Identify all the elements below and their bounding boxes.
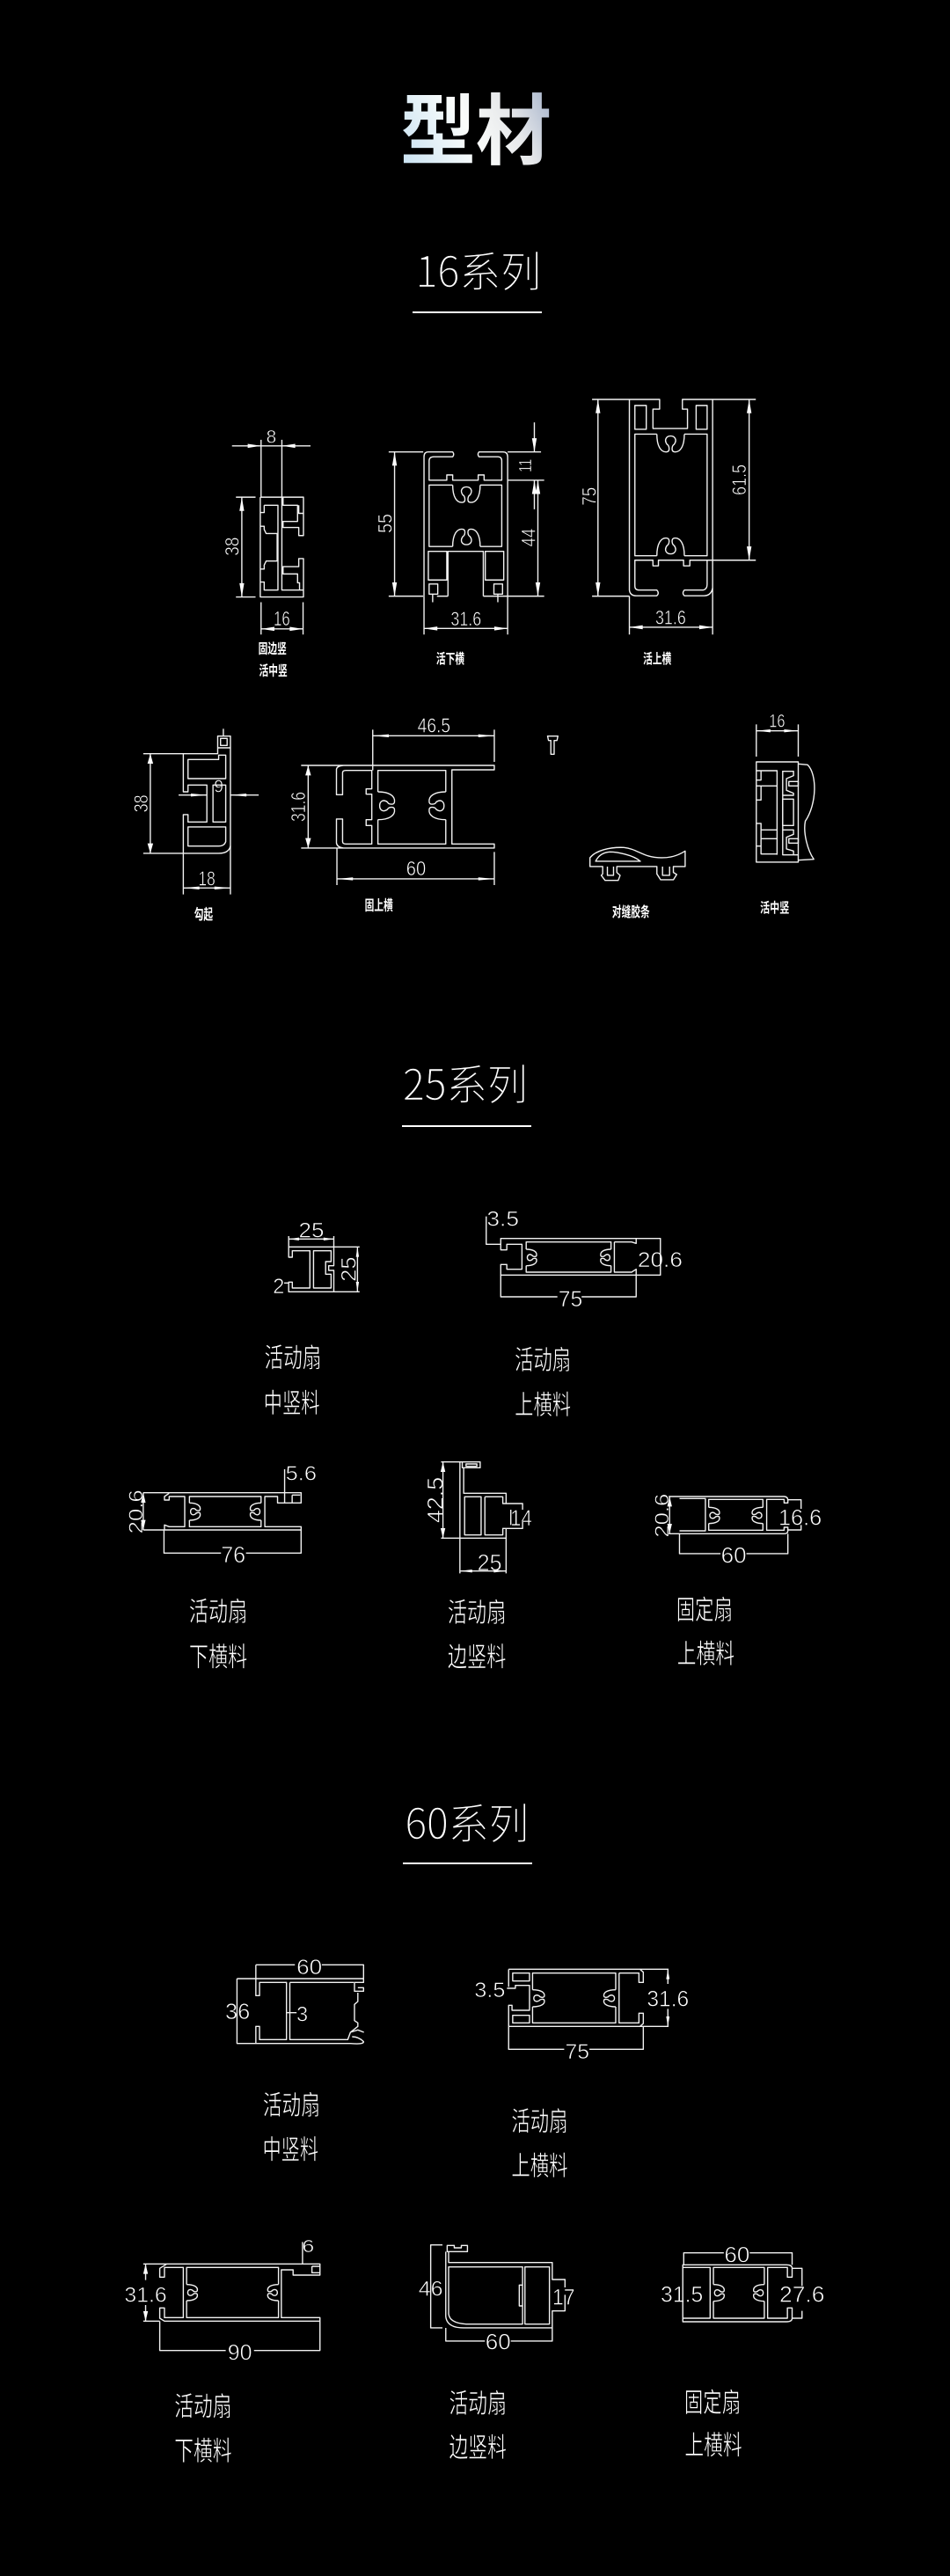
- caption: 活动扇 边竖料: [448, 1598, 506, 1672]
- profile: 活下横: 31.6: [450, 608, 481, 630]
- profile: 活动扇 边竖料: [424, 1462, 532, 1576]
- profile: 活动扇 中竖料: 36: [225, 2000, 250, 2024]
- profile: 勾起: 38: [130, 794, 152, 812]
- profile: 固定扇 上横料: 60: [724, 2243, 749, 2268]
- caption: 活上横: 活上横: [643, 650, 672, 667]
- profile: 固定扇 上横料: 31.5: [661, 2282, 703, 2307]
- caption: 活动扇 中竖料: [264, 1343, 321, 1418]
- panel: 60 series: 固定扇: [684, 2388, 741, 2418]
- panel: 60 series: [124, 1789, 824, 2466]
- profile: 活动扇 边竖料: [419, 2245, 575, 2354]
- panel: 25 series: 活动扇: [189, 1597, 247, 1627]
- profile: 活中竖: 16: [769, 711, 785, 732]
- panel: 60 series: 活动扇: [174, 2391, 232, 2422]
- profile: 活动扇 中竖料: [225, 1957, 364, 2044]
- profile: 固边竖 / 活中竖: 38: [222, 538, 243, 556]
- panel: 16 series: 勾起: [194, 906, 213, 923]
- profile: 活下横: 55: [375, 514, 396, 533]
- profile: 活动扇 上横料: 75: [559, 1287, 582, 1312]
- profile: 对缝胶条: [590, 847, 685, 881]
- profile: 活动扇 中竖料: 25: [299, 1219, 324, 1243]
- profile: 活动扇 下横料: 76: [221, 1543, 245, 1568]
- caption: 活动扇 上横料: [511, 2106, 568, 2181]
- profile: 活动扇 中竖料: 3: [296, 2003, 308, 2026]
- profile: 活上横: 75: [579, 487, 600, 506]
- panel: 25 series: 上横料: [677, 1639, 734, 1669]
- profile: 活动扇 下横料: 6: [302, 2236, 314, 2256]
- profile: 固上横: 60: [406, 859, 426, 880]
- profile: 固定扇 上横料: [651, 1494, 822, 1568]
- profile: 活动扇 边竖料: 60: [486, 2330, 511, 2354]
- profile: 活动扇 中竖料: 60: [296, 1957, 322, 1980]
- caption: 固边竖 活中竖: 固边竖: [259, 640, 287, 656]
- profile: 活动扇 边竖料: 42.5: [424, 1477, 449, 1523]
- profile: 活动扇 下横料: 20.6: [124, 1489, 147, 1533]
- panel: 25 series: [124, 1050, 822, 1672]
- caption: 固定扇 上横料: [684, 2388, 742, 2461]
- profile: 勾起: 9: [214, 776, 223, 796]
- profile: 活上横: 31.6: [655, 606, 686, 628]
- profile: 固边竖 / 活中竖: 16: [274, 608, 290, 630]
- icon: T pin: [547, 736, 558, 754]
- panel: 25 series: 边竖料: [448, 1642, 506, 1672]
- profile: 活动扇 边竖料: 25: [478, 1551, 502, 1576]
- profile: 活动扇 下横料: [124, 2236, 320, 2365]
- caption: 活动扇 中竖料: 活动扇: [265, 1343, 321, 1373]
- profile: 活动扇 上横料: [474, 1969, 689, 2064]
- profile: 活中竖: [756, 711, 815, 862]
- profile: 固上横: 31.6: [288, 792, 311, 822]
- profile: 固上横: 46.5: [418, 715, 450, 737]
- profile: 活动扇 边竖料: 46: [419, 2277, 443, 2301]
- panel: 25 series: 下横料: [189, 1642, 247, 1672]
- profile: 固定扇 上横料: 20.6: [651, 1494, 673, 1538]
- profile: 活上横: 61.5: [728, 465, 750, 495]
- caption: 活动扇 上横料: 活动扇: [515, 1345, 571, 1375]
- caption: 活动扇 下横料: [189, 1597, 247, 1672]
- caption: 活动扇 下横料: [174, 2391, 232, 2466]
- profile: 勾起: 18: [199, 867, 216, 890]
- profile: 活上横: [579, 399, 756, 634]
- profile: 固定扇 上横料: [661, 2243, 824, 2322]
- caption: 活下横: 活下横: [436, 650, 464, 667]
- panel: 16 series: [130, 238, 815, 923]
- profile: 活动扇 下横料: 31.6: [124, 2283, 167, 2307]
- caption: 活动扇 边竖料: [449, 2389, 507, 2463]
- caption: 活动扇 中竖料: 中竖料: [263, 2134, 318, 2164]
- heading: 25系列: 25系列: [403, 1050, 528, 1112]
- profile: 固定扇 上横料: 16.6: [778, 1505, 822, 1530]
- caption: 固边竖 活中竖: 活中竖: [259, 662, 288, 679]
- profile: 活动扇 上横料: 20.6: [638, 1248, 683, 1272]
- profile: 固边竖 / 活中竖: [222, 427, 311, 634]
- caption: 固定扇 上横料: [676, 1595, 734, 1669]
- panel: 25 series: 固定扇: [676, 1595, 733, 1625]
- caption: 活动扇 上横料: 上横料: [511, 2151, 568, 2181]
- heading: 60系列: 60系列: [405, 1789, 530, 1851]
- profile: 活动扇 边竖料: 14: [510, 1506, 532, 1530]
- profile: 活动扇 上横料: 31.6: [647, 1987, 689, 2011]
- profile: 活下横: 44: [518, 529, 539, 546]
- caption: 固边竖 活中竖: [259, 640, 288, 679]
- profile: 活动扇 中竖料: [273, 1219, 362, 1299]
- panel: 60 series: 下横料: [174, 2436, 232, 2466]
- panel: 16 series: 对缝胶条: [612, 904, 650, 920]
- profile: 固上横: [288, 715, 494, 885]
- panel: 60 series: 上横料: [684, 2430, 742, 2461]
- profile: 勾起: [130, 728, 259, 895]
- profile: 活下横: 11: [515, 459, 536, 472]
- panel: 25 series: 活动扇: [448, 1598, 506, 1628]
- profile: 固边竖 / 活中竖: 8: [267, 427, 276, 448]
- profile: 活动扇 边竖料: 17: [552, 2286, 575, 2309]
- profile: 活动扇 下横料: 90: [228, 2340, 252, 2365]
- profile: 活动扇 中竖料: 25: [338, 1256, 362, 1282]
- panel: 16 series: 活中竖: [760, 901, 789, 916]
- caption: 活动扇 上横料: [515, 1345, 571, 1420]
- heading: 16系列: 16系列: [415, 238, 542, 299]
- profile: 活下横: [375, 422, 544, 634]
- profile: 活动扇 中竖料: 2: [273, 1275, 284, 1299]
- caption: 活动扇 上横料: 活动扇: [511, 2106, 568, 2136]
- profile: 活动扇 上横料: 75: [566, 2041, 589, 2064]
- profile: 活动扇 下横料: [124, 1462, 317, 1568]
- caption: 活动扇 上横料: 上横料: [515, 1390, 571, 1420]
- panel: 16 series: 固上横: [365, 897, 393, 913]
- profile: 活动扇 上横料: [486, 1208, 683, 1312]
- panel: 60 series: 活动扇: [449, 2389, 507, 2419]
- profile: 固定扇 上横料: 60: [721, 1543, 747, 1568]
- profile: 活动扇 上横料: 3.5: [486, 1208, 519, 1231]
- caption: 活动扇 中竖料: [263, 2089, 320, 2164]
- profile: 活动扇 下横料: 5.6: [286, 1462, 317, 1485]
- caption: 活动扇 中竖料: 中竖料: [264, 1388, 320, 1418]
- panel: 60 series: 边竖料: [449, 2433, 507, 2463]
- caption: 活动扇 中竖料: 活动扇: [263, 2089, 320, 2120]
- profile: 活动扇 上横料: 3.5: [474, 1980, 505, 2002]
- title: 型材: [400, 88, 552, 175]
- profile: 固定扇 上横料: 27.6: [779, 2282, 824, 2307]
